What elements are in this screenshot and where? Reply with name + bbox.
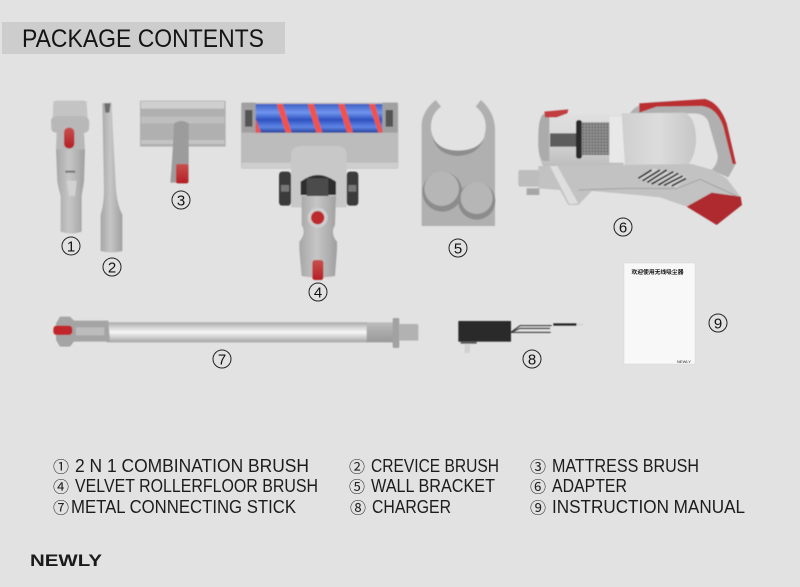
item 9: instruction manual: 欢迎使用无线吸尘器 [632,268,684,276]
legend row 2: ⑥ [530,474,546,498]
dust bin [538,109,625,167]
number marker 3: 3 [177,192,185,210]
number marker 9: 9 [714,316,722,332]
legend row 1: ① [53,454,69,478]
item 1: combination brush [51,101,89,233]
item 9: instruction manual: NEWLY [677,359,691,364]
body [538,164,742,225]
legend row 1: MATTRESS BRUSH [552,455,699,476]
nozzle [518,170,539,195]
number marker 5 [449,239,467,258]
legend row 1: ② [349,454,365,478]
number marker 2 [103,258,121,276]
joint [299,196,337,278]
number marker 8: 8 [528,352,536,368]
red tab [312,260,323,280]
brand logo: NEWLY: NEWLY [30,552,102,570]
heading: package contents: PACKAGE CONTENTS [22,25,264,53]
item 5: wall bracket [422,100,495,226]
number marker 6 [614,218,632,236]
legend row 1: CREVICE BRUSH [371,455,499,476]
number marker 7: 7 [218,352,226,368]
red button [311,211,324,224]
roller [241,103,398,169]
item 6: handheld vacuum main unit [518,99,742,225]
red battery base [687,193,742,225]
legend row 2 [53,474,627,498]
number marker 3 [172,191,190,210]
legend row 1: ③ [530,454,546,478]
vents [638,170,686,186]
wheels [279,172,358,206]
number marker 4: 4 [314,284,322,302]
number marker 7 [213,350,231,368]
legend row 3: ⑨ [530,494,546,518]
legend row 3 [53,494,745,518]
legend row 2: WALL BRACKET [371,475,495,496]
item 4: velvet roller floor brush [241,103,398,280]
number marker 2: 2 [108,260,116,276]
legend row 2: ④ [53,474,69,498]
legend row 3: METAL CONNECTING STICK [71,496,297,517]
legend row 2: VELVET ROLLERFLOOR BRUSH [75,475,318,496]
number marker 8 [523,350,541,368]
motor housing [622,113,696,166]
item 9: instruction manual [624,263,695,364]
item 2: crevice brush [101,102,122,252]
number marker 5: 5 [454,240,462,258]
number marker 4 [309,283,327,302]
neck plate [291,146,347,207]
item 8: charger [458,321,583,353]
number marker 1 [62,237,80,256]
legend row 1 [53,454,699,478]
number marker 6: 6 [619,220,627,236]
legend row 3: ⑦ [53,494,69,518]
legend row 2: ADAPTER [552,475,627,496]
legend row 3: ⑧ [350,494,366,518]
handle [630,99,736,177]
legend row 3: CHARGER [372,496,451,517]
number marker 9 [709,314,727,332]
item 3: mattress brush [140,101,226,183]
number marker 1: 1 [67,238,75,256]
legend row 1: 2 N 1 COMBINATION BRUSH [75,455,309,476]
legend row 3: INSTRUCTION MANUAL [552,496,745,517]
legend: numbered list of contents [53,454,745,518]
item 7: metal connecting stick [53,317,418,348]
legend row 2: ⑤ [349,474,365,498]
